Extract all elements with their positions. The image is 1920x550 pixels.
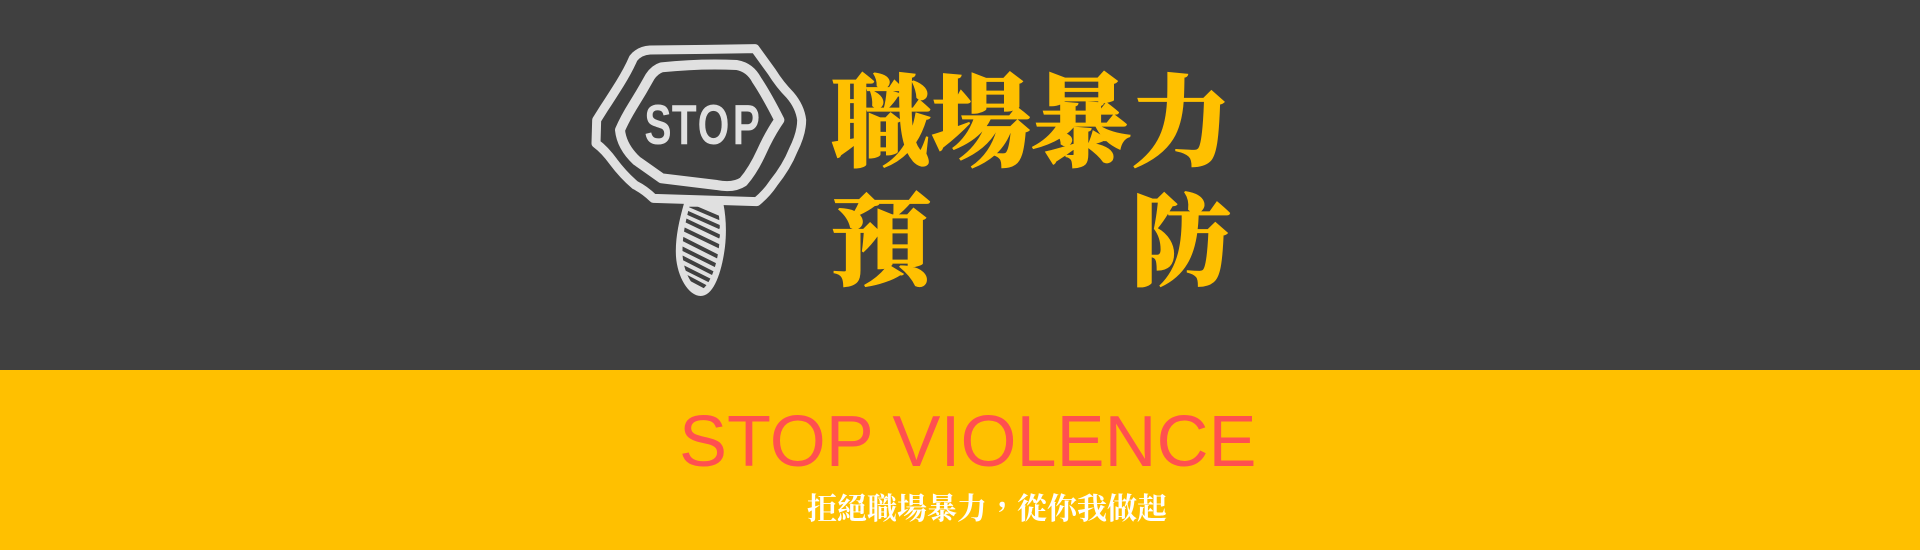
sign handle — [676, 203, 726, 296]
title: line 1: 職場暴力 — [831, 69, 1231, 180]
sign outer border — [596, 49, 802, 202]
title: line 2 — [831, 188, 1231, 299]
title: line 2: 防 — [1131, 188, 1231, 299]
sign inner border — [620, 65, 779, 186]
heading: STOP VIOLENCE: STOP VIOLENCE — [679, 402, 1257, 482]
title: line 2: 預 — [831, 188, 931, 299]
bottom panel: yellow band — [0, 370, 1920, 550]
subtitle: 拒絕職場暴力，從你我做起 — [807, 493, 1167, 526]
top panel: dark background — [592, 44, 1230, 296]
icon: stop sign — [592, 44, 806, 296]
sign text: STOP: STOP — [644, 94, 760, 157]
